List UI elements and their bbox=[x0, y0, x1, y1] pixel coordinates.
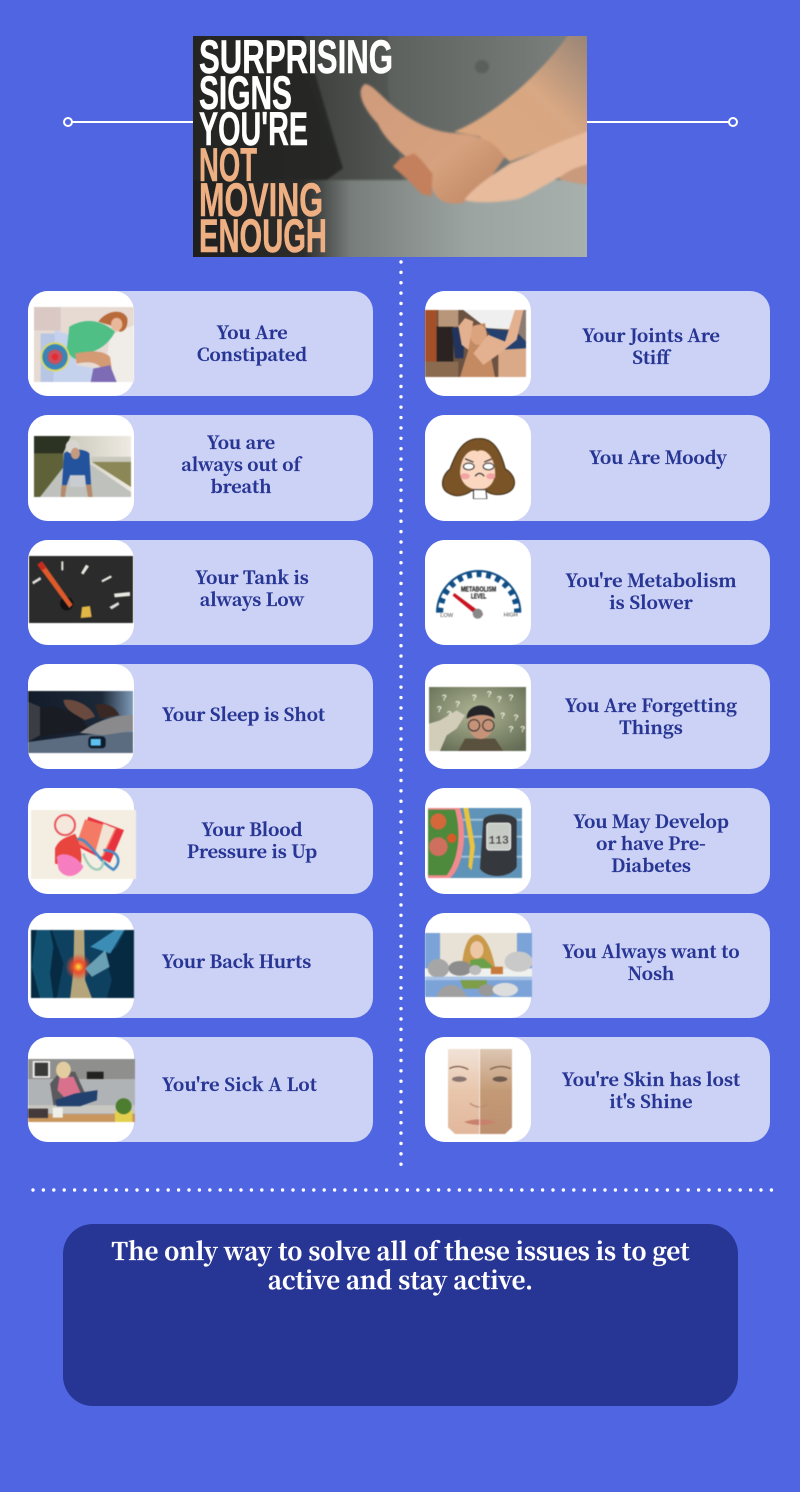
horizontal dotted divider bbox=[31, 1188, 774, 1192]
card: You Are Constipated bbox=[28, 291, 373, 396]
card: You Are Forgetting Things bbox=[425, 664, 770, 769]
image: man with question marks: ? bbox=[472, 692, 477, 702]
connector line right with ring bbox=[587, 117, 738, 127]
hero image with title bbox=[193, 36, 587, 257]
label: You Are bbox=[216, 319, 288, 345]
image: metabolism gauge: LEVEL bbox=[471, 593, 487, 600]
image: woman in fridge bbox=[424, 932, 532, 998]
connector line left with ring bbox=[63, 117, 193, 127]
label bbox=[562, 1066, 740, 1114]
image: man with question marks: ? bbox=[487, 689, 492, 699]
card: You're Skin has lost it's Shine bbox=[425, 1037, 770, 1142]
hero image with title: SIGNS bbox=[199, 66, 292, 119]
image: man with question marks: ? bbox=[513, 712, 519, 722]
image: salad and glucose meter: 113 bbox=[488, 835, 509, 847]
label: or have Pre- bbox=[596, 830, 706, 856]
label: You May Develop bbox=[573, 808, 729, 834]
label: Your Sleep is Shot bbox=[162, 701, 325, 727]
image: hands on knee bbox=[424, 309, 527, 378]
card: You're Metabolism is Slower bbox=[425, 540, 770, 645]
label: Your Tank is bbox=[195, 564, 309, 590]
image: man with question marks: ? bbox=[447, 709, 452, 719]
card: Your Sleep is Shot bbox=[28, 664, 373, 769]
hero image with title: NOT bbox=[199, 138, 257, 191]
image: metabolism gauge: METABOLISM bbox=[461, 586, 496, 593]
label bbox=[565, 567, 737, 615]
label: breath bbox=[210, 473, 271, 499]
label: Things bbox=[619, 714, 683, 740]
label: Constipated bbox=[197, 341, 307, 367]
label: You Are Forgetting bbox=[565, 692, 737, 718]
label: Your Back Hurts bbox=[162, 948, 311, 974]
label bbox=[573, 808, 729, 878]
label bbox=[562, 938, 740, 986]
image: woman on toilet bbox=[34, 306, 134, 383]
conclusion text: active and stay active. bbox=[268, 1261, 533, 1296]
image: salad and glucose meter bbox=[427, 807, 523, 879]
image: metabolism gauge: HIGH bbox=[504, 613, 518, 619]
image: man with question marks: ? bbox=[520, 724, 525, 734]
label bbox=[187, 816, 317, 864]
image: metabolism gauge bbox=[435, 569, 522, 620]
image: man with question marks: ? bbox=[500, 711, 505, 721]
image: sick woman on sofa bbox=[27, 1058, 136, 1123]
label: always Low bbox=[200, 586, 304, 612]
conclusion text bbox=[111, 1232, 690, 1296]
label: Your Joints Are bbox=[582, 322, 720, 348]
vertical dotted divider bbox=[399, 260, 403, 1166]
hero image with title: MOVING bbox=[199, 173, 323, 226]
label: You're Metabolism bbox=[565, 567, 737, 593]
image: man with question marks: ? bbox=[508, 692, 514, 702]
label: it's Shine bbox=[609, 1088, 693, 1114]
card: Your Back Hurts bbox=[28, 913, 373, 1018]
image: man with question marks: ? bbox=[497, 694, 502, 704]
card: Your Joints Are Stiff bbox=[425, 291, 770, 396]
image: man with question marks: ? bbox=[442, 692, 447, 702]
label: Stiff bbox=[632, 344, 670, 370]
card: You May Develop or have Pre-Diabetes bbox=[425, 788, 770, 894]
label: Diabetes bbox=[611, 852, 691, 878]
image: metabolism gauge: LOW bbox=[440, 613, 454, 619]
image: blood pressure cuff and heart bbox=[30, 810, 136, 880]
conclusion text: The only way to solve all of these issues is to get bbox=[111, 1232, 690, 1267]
label bbox=[582, 322, 720, 370]
image: man with question marks: ? bbox=[437, 704, 442, 714]
label: Pressure is Up bbox=[187, 838, 317, 864]
image: grumpy cartoon girl bbox=[441, 437, 516, 500]
image: fuel gauge bbox=[28, 555, 134, 624]
image: spine pain bbox=[30, 929, 135, 999]
image: tired man bbox=[33, 435, 132, 498]
image: man with question marks: ? bbox=[508, 724, 514, 734]
label: You're Skin has lost bbox=[562, 1066, 740, 1092]
card: You are always out of breath bbox=[28, 415, 373, 521]
card: Your Tank is always Low bbox=[28, 540, 373, 645]
label bbox=[195, 564, 309, 612]
image: man with question marks: ? bbox=[455, 699, 460, 709]
label bbox=[181, 429, 302, 499]
label: You Are Moody bbox=[589, 444, 727, 470]
image: man with question marks bbox=[428, 686, 527, 752]
label: You're Sick A Lot bbox=[162, 1071, 317, 1097]
panel: conclusion bbox=[63, 1224, 738, 1406]
image: sleepless woman in bed bbox=[27, 690, 134, 754]
label: You Always want to bbox=[562, 938, 740, 964]
card: Your Blood Pressure is Up bbox=[28, 788, 373, 894]
label: is Slower bbox=[609, 589, 693, 615]
card: You Always want to Nosh bbox=[425, 913, 770, 1018]
card: You're Sick A Lot bbox=[28, 1037, 373, 1142]
image: face comparison bbox=[448, 1048, 513, 1135]
label bbox=[197, 319, 307, 367]
label: always out of bbox=[181, 451, 301, 477]
label: You are bbox=[207, 429, 275, 455]
label bbox=[565, 692, 737, 740]
label: Nosh bbox=[628, 960, 674, 986]
label: Your Blood bbox=[201, 816, 303, 842]
card: You Are Moody bbox=[425, 415, 770, 521]
hero image with title: YOU'RE bbox=[199, 102, 308, 155]
